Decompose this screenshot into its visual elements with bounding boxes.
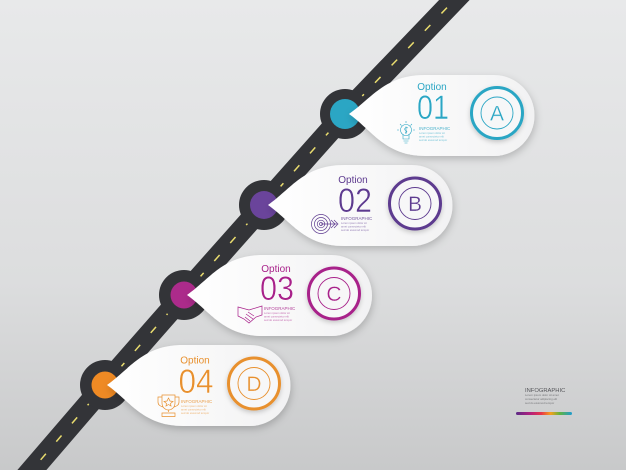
card shape 2: [268, 165, 452, 246]
description 01: INFOGRAPHIC: [419, 126, 451, 131]
description 01: [419, 126, 451, 142]
letter badge A: [472, 88, 522, 138]
number 04: 04: [178, 363, 214, 401]
card 2: option 02: [239, 165, 452, 246]
description 04: INFOGRAPHIC: [181, 399, 213, 404]
description 04: Lorem ipsum dolor sit: [181, 404, 207, 408]
card 1: option 01: [320, 75, 534, 156]
road node 4: [80, 360, 130, 410]
road: [25, 0, 462, 470]
description 03: amet consectetur elit: [264, 314, 289, 318]
description 02: sed do eiusmod tempor: [341, 228, 369, 232]
road centre dashes: [25, 0, 462, 470]
card shape 1: [349, 75, 534, 156]
description 04: amet consectetur elit: [181, 408, 206, 412]
icon: light bulb with dollar: [397, 121, 415, 143]
legend block: infographic with rainbow bar: INFOGRAPHIC: [525, 388, 565, 394]
label option 02: Option: [338, 175, 368, 186]
card 3: option 03: [159, 255, 372, 336]
legend block: infographic with rainbow bar: consectetur adipiscing elit: [525, 397, 557, 401]
card shape 3: [187, 255, 372, 336]
description 04: sed do eiusmod tempor: [181, 411, 209, 415]
number 02: 02: [338, 182, 372, 220]
card shape 4: [107, 345, 290, 426]
description 02: amet consectetur elit: [341, 224, 366, 228]
legend block: infographic with rainbow bar: Lorem ipsum dolor sit amet: [525, 393, 559, 397]
legend block: infographic with rainbow bar: [516, 388, 572, 415]
number 01: 01: [417, 89, 449, 127]
letter badge D: D: [246, 373, 262, 396]
description 01: amet consectetur elit: [419, 134, 444, 138]
icon: target with arrow: [312, 214, 338, 234]
description 04: [181, 399, 213, 415]
number 03: 03: [260, 270, 294, 308]
description 01: Lorem ipsum dolor sit: [419, 131, 445, 135]
road node 3: [159, 270, 209, 320]
label option 03: Option: [261, 264, 291, 275]
legend block: infographic with rainbow bar: sed do eiusmod tempor: [525, 401, 554, 405]
letter badge D: [228, 358, 280, 409]
description 02: [341, 216, 373, 232]
letter badge A: A: [490, 102, 504, 126]
road node 1: [320, 89, 370, 139]
letter badge B: B: [408, 193, 422, 216]
description 03: INFOGRAPHIC: [264, 306, 296, 311]
description 02: INFOGRAPHIC: [341, 216, 373, 221]
icon: handshake: [238, 306, 262, 323]
letter badge B: [390, 178, 440, 229]
description 03: [264, 306, 296, 322]
letter badge C: C: [326, 283, 342, 306]
rainbow bar: [516, 412, 572, 415]
description 03: sed do eiusmod tempor: [264, 318, 292, 322]
description 01: sed do eiusmod tempor: [419, 138, 447, 142]
card 4: option 04: [80, 345, 290, 426]
icon: trophy: [158, 395, 179, 416]
description 02: Lorem ipsum dolor sit: [341, 221, 367, 225]
letter badge C: [308, 268, 360, 319]
road node 2: [239, 180, 289, 230]
label option 01: Option: [417, 82, 447, 93]
label option 04: Option: [180, 356, 210, 366]
description 03: Lorem ipsum dolor sit: [264, 311, 290, 315]
